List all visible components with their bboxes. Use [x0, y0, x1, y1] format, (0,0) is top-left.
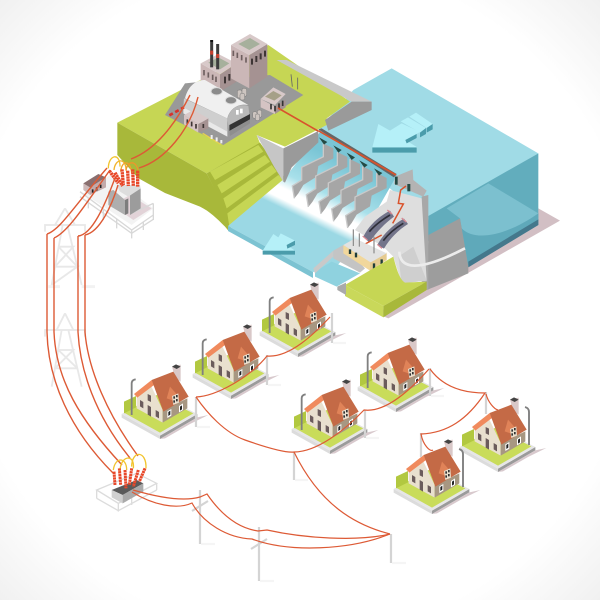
house 2	[193, 324, 279, 399]
transformer box	[112, 480, 143, 503]
small building right	[261, 87, 286, 114]
transformers	[108, 185, 141, 215]
powerhouse	[333, 229, 387, 273]
insulators	[109, 169, 138, 187]
house 1	[122, 364, 208, 439]
utility poles	[192, 313, 486, 581]
reservoir water surface	[318, 68, 538, 218]
lower substation	[97, 454, 157, 512]
storage tanks	[237, 88, 262, 121]
lamp 6	[525, 407, 529, 445]
tall building	[231, 34, 267, 88]
left abutment	[257, 131, 318, 183]
lamp 7	[459, 449, 463, 487]
green island	[337, 257, 427, 317]
turbine hall	[183, 80, 250, 137]
substation platform	[80, 175, 153, 238]
upper substation and towers	[45, 157, 153, 387]
main high-voltage wires	[47, 95, 198, 473]
right gray dam wall	[422, 195, 468, 290]
control building	[83, 174, 106, 195]
house 3	[260, 282, 346, 357]
tailrace water	[313, 251, 360, 287]
white service pipe	[399, 248, 465, 266]
penstock pipes	[363, 210, 408, 249]
hydro dam base and reservoir	[318, 68, 560, 318]
tower one	[45, 208, 95, 287]
water surface	[228, 132, 397, 272]
left stack building	[201, 54, 237, 92]
house 4	[292, 379, 378, 454]
house 5	[358, 337, 444, 412]
ground shadow	[377, 208, 560, 318]
platform rails	[97, 473, 157, 512]
upper gray wall	[277, 60, 372, 131]
lamp posts	[291, 74, 298, 89]
red feed line	[363, 186, 406, 245]
small building left	[184, 110, 208, 133]
concrete chute	[355, 190, 427, 283]
land side cliff	[117, 123, 228, 231]
yellow arcs	[113, 454, 146, 472]
red and white barrier	[169, 107, 184, 115]
river and spillway water with foam band	[228, 132, 397, 278]
houses	[122, 282, 546, 514]
gray factory pad	[165, 75, 303, 145]
land and hydro plant factory	[117, 34, 350, 231]
reservoir cross section	[427, 153, 538, 267]
bollards	[212, 135, 221, 143]
house 6	[460, 397, 546, 472]
insulators	[114, 468, 145, 488]
line from plant to dam	[278, 108, 318, 131]
spillway piers	[292, 143, 387, 228]
terraces	[207, 143, 285, 230]
dam structure	[257, 60, 468, 317]
chimneys	[210, 40, 218, 69]
chute facets	[398, 247, 427, 283]
tower two	[45, 313, 85, 387]
gate tower tops	[394, 169, 427, 197]
flow arrow: river	[263, 233, 295, 255]
distribution wires	[132, 317, 498, 548]
house 7	[394, 439, 480, 514]
yellow road stripe	[203, 133, 221, 144]
bridge with power line	[318, 128, 397, 177]
yellow arcs	[108, 157, 139, 174]
green land top	[117, 45, 350, 173]
river front edge	[228, 226, 313, 278]
flow arrow: reservoir	[372, 113, 433, 153]
